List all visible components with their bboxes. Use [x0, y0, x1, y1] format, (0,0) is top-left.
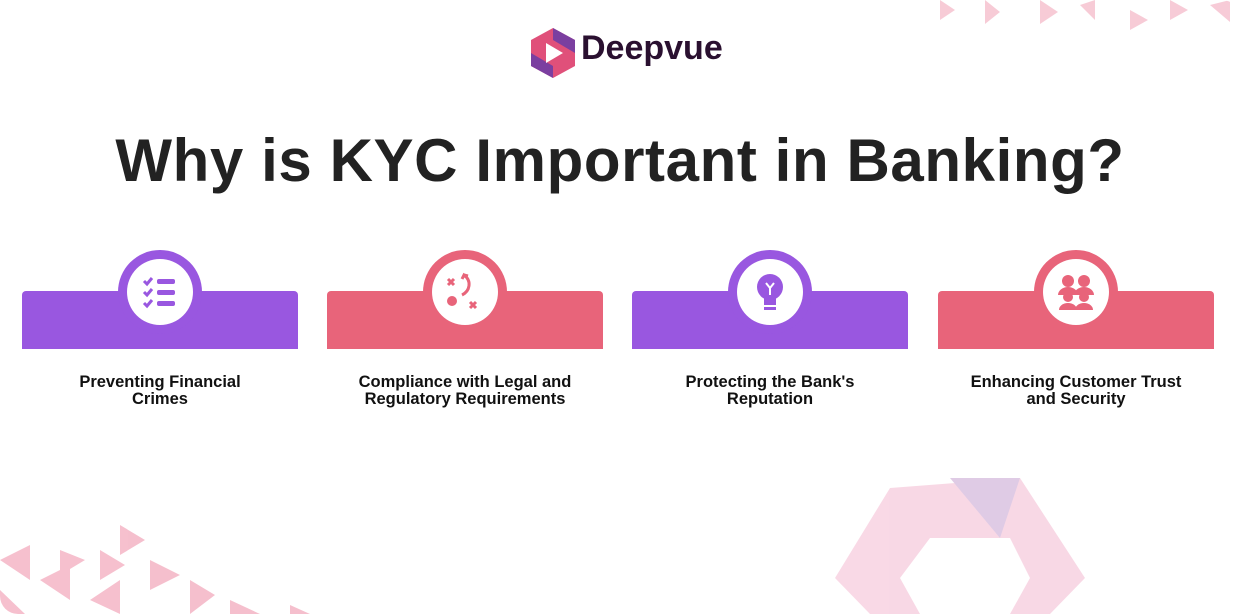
decoration: top right triangles: [940, 0, 1230, 30]
card 2: [327, 250, 603, 408]
card 3: Reputation: [727, 390, 813, 408]
card 1: Crimes: [132, 390, 188, 408]
card 1: Preventing Financial: [79, 373, 241, 391]
card 4: and Security: [1026, 390, 1126, 408]
decoration: bottom right hexagon logo: [835, 478, 1085, 614]
icon: checklist: [143, 277, 175, 308]
card 4: [938, 250, 1214, 408]
title: Why is KYC Important in Banking?: [115, 127, 1125, 194]
icon: people: [1058, 275, 1094, 310]
logo: [531, 28, 723, 78]
icon: logo hexagon: [531, 28, 575, 78]
card 2: Regulatory Requirements: [365, 390, 565, 408]
decoration: bottom left triangles: [0, 525, 310, 614]
card 4: Enhancing Customer Trust: [971, 373, 1181, 391]
icon: lightbulb: [757, 274, 783, 310]
icon: strategy: [447, 272, 477, 309]
card 3: Protecting the Bank's: [686, 373, 854, 391]
brand name: Deepvue: [581, 29, 723, 67]
card 3: [632, 250, 908, 408]
card 2: Compliance with Legal and: [359, 373, 571, 391]
card 1: [22, 250, 298, 408]
